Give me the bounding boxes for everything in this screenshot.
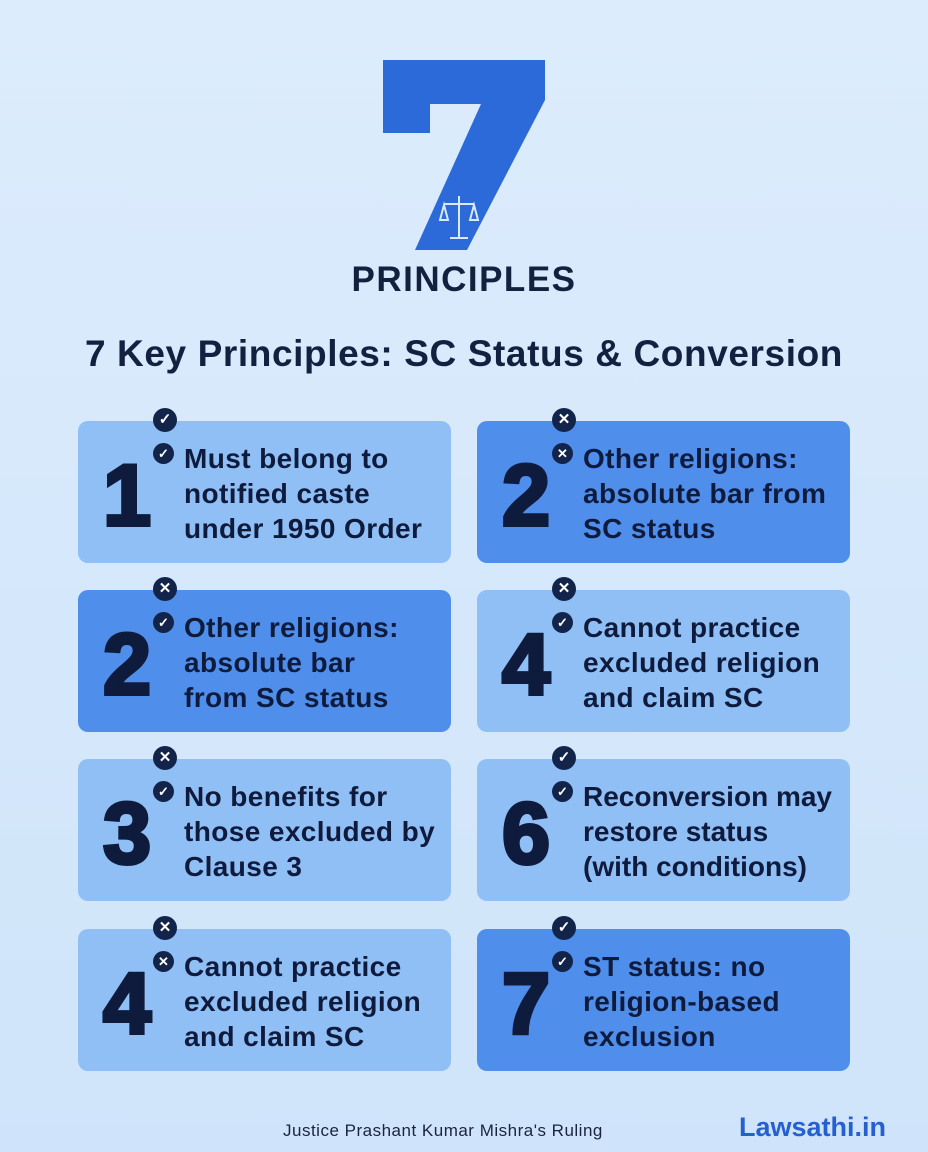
- card 4 right: ✓: [557, 615, 568, 630]
- card 4 right: and claim SC: [583, 682, 764, 713]
- card 4 left: Cannot practice: [184, 951, 402, 982]
- card 7: ST status: no: [583, 951, 766, 982]
- card 7: [477, 929, 850, 1071]
- text: ✓: [558, 919, 570, 936]
- brand: Lawsathi.in: [739, 1112, 886, 1142]
- PRINCIPLES label: PRINCIPLES: [351, 260, 577, 299]
- card 4 right: Cannot practice: [583, 612, 801, 643]
- text: ✕: [159, 919, 171, 936]
- card 4 right: [477, 590, 850, 732]
- big 7 with scales icon: [383, 60, 545, 250]
- card 4 left: and claim SC: [184, 1021, 365, 1052]
- card 3: ✓: [158, 784, 169, 799]
- card 6: ✓: [557, 784, 568, 799]
- card 6: Reconversion may: [583, 781, 832, 812]
- card 4 left: ✕: [158, 954, 169, 969]
- card 3: those excluded by: [184, 816, 435, 847]
- card 2 right: [477, 421, 850, 563]
- title: 7 Key Principles: SC Status & Conversion: [85, 333, 843, 374]
- card 4 left: 4: [103, 956, 151, 1052]
- card 7: ✓: [557, 954, 568, 969]
- card 3: No benefits for: [184, 781, 388, 812]
- card 1: 1: [103, 448, 151, 544]
- card 7: 7: [502, 956, 550, 1052]
- card 2 left: Other religions:: [184, 612, 399, 643]
- card 3: [78, 759, 451, 901]
- card 1: [78, 421, 451, 563]
- card 1: under 1950 Order: [184, 513, 422, 544]
- footer credit: Justice Prashant Kumar Mishra's Ruling: [283, 1121, 603, 1140]
- card 2 right: 2: [502, 448, 550, 544]
- text: ✕: [159, 749, 171, 766]
- card 2 right: Other religions:: [583, 443, 798, 474]
- card 4 right: 4: [502, 617, 550, 713]
- card 1: notified caste: [184, 478, 370, 509]
- text: ✓: [558, 749, 570, 766]
- text: ✕: [558, 580, 570, 597]
- card 7: religion-based: [583, 986, 780, 1017]
- card 4 right: excluded religion: [583, 647, 820, 678]
- text: ✕: [558, 411, 570, 428]
- text: ✓: [159, 411, 171, 428]
- card 6: restore status: [583, 816, 768, 847]
- card 4 left: excluded religion: [184, 986, 421, 1017]
- card 2 right: ✕: [557, 446, 568, 461]
- card 7: exclusion: [583, 1021, 716, 1052]
- card 3: Clause 3: [184, 851, 302, 882]
- card 2 right: SC status: [583, 513, 716, 544]
- card 1: Must belong to: [184, 443, 389, 474]
- card 4 left: [78, 929, 451, 1071]
- card 1: ✓: [158, 446, 169, 461]
- text: ✕: [159, 580, 171, 597]
- card 2 left: [78, 590, 451, 732]
- card 2 left: ✓: [158, 615, 169, 630]
- card 2 left: from SC status: [184, 682, 389, 713]
- card 2 left: 2: [103, 617, 151, 713]
- card 6: [477, 759, 850, 901]
- card 3: 3: [103, 786, 151, 882]
- card 2 left: absolute bar: [184, 647, 355, 678]
- card 6: 6: [502, 786, 550, 882]
- card 2 right: absolute bar from: [583, 478, 826, 509]
- card 6: (with conditions): [583, 851, 807, 882]
